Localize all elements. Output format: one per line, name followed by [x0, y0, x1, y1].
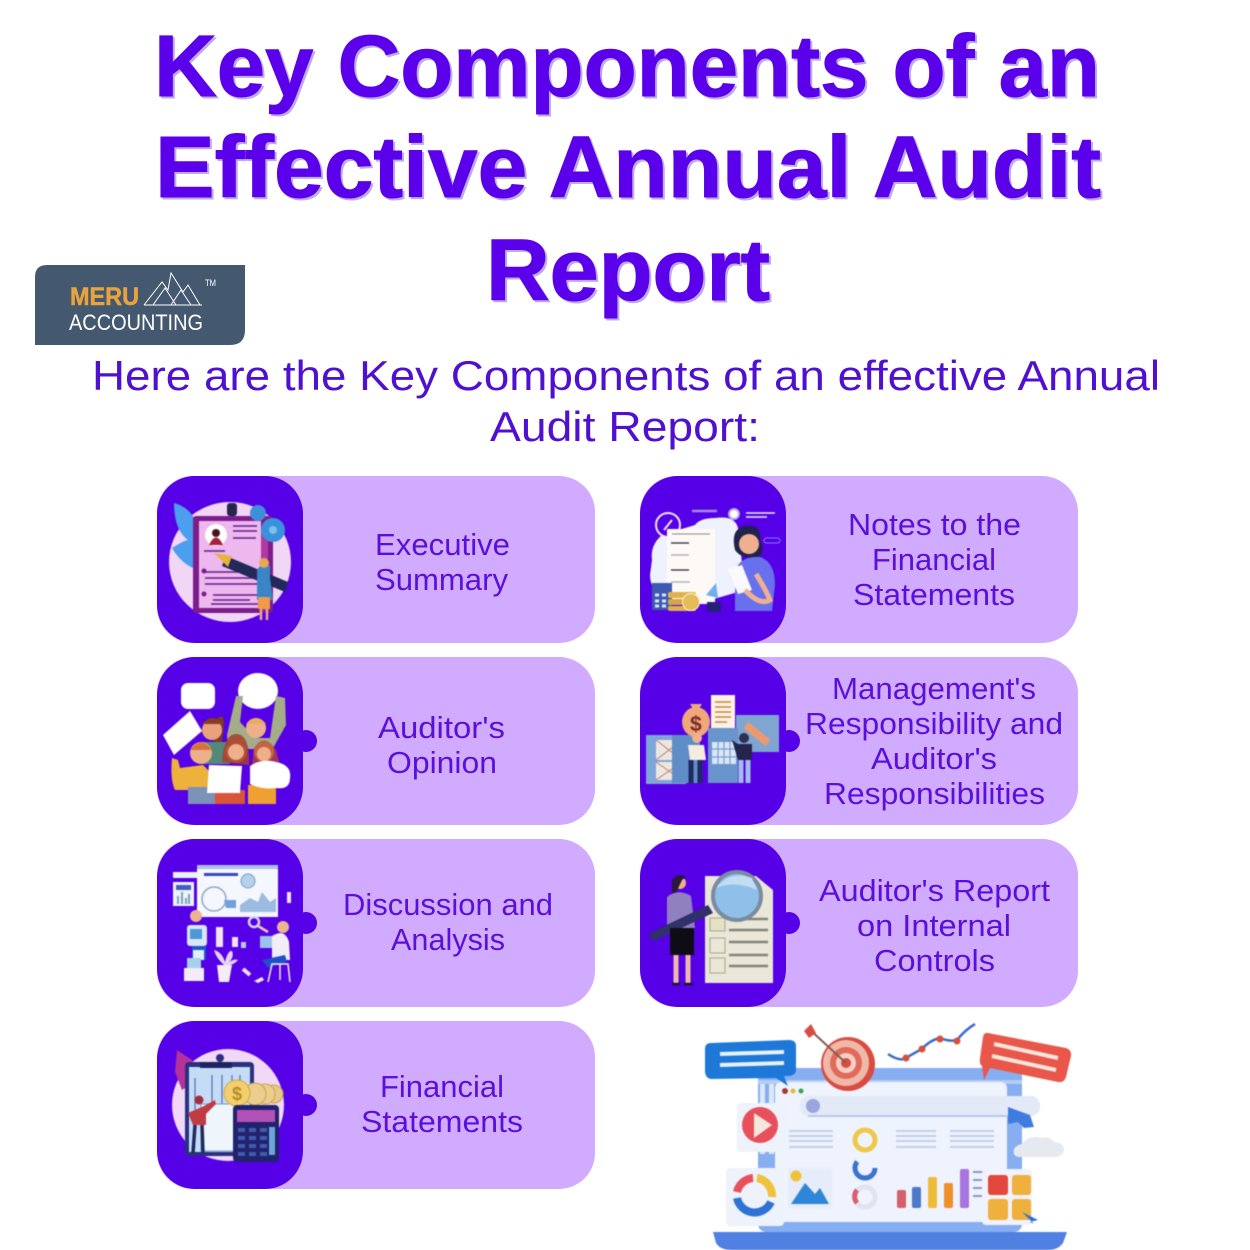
title: Key Components of an — [156, 20, 1102, 117]
icon: clipboard resume with pen — [169, 502, 291, 622]
icon: donut chart card — [726, 1168, 784, 1226]
panel: Executive Summary: Summary — [375, 562, 508, 597]
icon: money bag, receipt and two workers — [646, 695, 779, 784]
panel: Auditor's Report on Internal Controls: Controls — [874, 943, 995, 978]
panel: Notes to the Financial Statements: Statements — [853, 577, 1015, 612]
title: Key Components of an — [154, 18, 1100, 115]
title — [154, 18, 1103, 321]
panel: Notes to the Financial Statements: Financial — [872, 542, 996, 577]
panel: Auditor's Opinion — [157, 657, 595, 825]
text lines on the screen — [789, 1131, 994, 1147]
bar chart — [897, 1169, 983, 1208]
title: Report — [488, 224, 772, 321]
subtitle — [92, 352, 1160, 450]
logo: Meru Accounting: MERU — [70, 283, 139, 311]
line chart — [888, 1024, 975, 1062]
panel: Executive Summary: Executive — [375, 527, 510, 562]
icon: tile grid card — [982, 1169, 1038, 1225]
icon: cloud — [1014, 1137, 1064, 1157]
icon: blue speech bubble — [705, 1040, 796, 1086]
icon: picture with mountains — [788, 1168, 832, 1208]
icon: clipboard, coins and calculator: $ — [232, 1084, 242, 1104]
panel: Auditor's Report on Internal Controls — [640, 839, 1078, 1007]
title: Effective Annual Audit — [155, 119, 1101, 216]
icon: people presenting dashboards — [173, 865, 291, 983]
icon: red speech bubble — [980, 1033, 1071, 1082]
panel: Discussion and Analysis: Analysis — [391, 922, 505, 957]
panel: Financial Statements: Financial — [380, 1069, 504, 1104]
panel: Auditor's Opinion: Auditor's — [378, 710, 505, 745]
icon: money bag, receipt and two workers: $ — [690, 713, 702, 736]
logo: Meru Accounting — [35, 265, 245, 345]
panel: Auditor's Report on Internal Controls: Auditor's Report — [819, 873, 1050, 908]
icon: clipboard, coins and calculator — [172, 1049, 284, 1162]
subtitle: Here are the Key Components of an effective Annual — [92, 352, 1160, 399]
icon: target with arrow — [804, 1024, 875, 1091]
logo: Meru Accounting: ACCOUNTING — [69, 310, 203, 335]
panel: Financial Statements: Statements — [361, 1104, 523, 1139]
panel: Management's Responsibility and Auditor's Responsibilities: Management's — [832, 671, 1036, 706]
panel: Auditor's Opinion: Opinion — [387, 745, 497, 780]
title: Report — [486, 222, 770, 319]
panel: Notes to the Financial Statements: Notes to the — [848, 507, 1021, 542]
icon: group of people with speech bubbles — [163, 673, 290, 804]
title: Effective Annual Audit — [157, 121, 1103, 218]
subtitle: Audit Report: — [490, 403, 760, 450]
panel: Executive Summary — [157, 476, 595, 643]
logo: Meru Accounting: TM — [205, 278, 216, 288]
panel: Financial Statements — [157, 1021, 595, 1189]
illustration: laptop with analytics dashboard — [705, 1024, 1071, 1250]
panel: Discussion and Analysis — [157, 839, 595, 1007]
icon: woman reading a document — [650, 509, 780, 612]
panel: Notes to the Financial Statements — [640, 476, 1078, 643]
icon: small donut charts — [855, 1130, 875, 1207]
panel: Management's Responsibility and Auditor's Responsibilities: Responsibility and — [805, 706, 1063, 741]
panel: Auditor's Report on Internal Controls: on Internal — [857, 908, 1011, 943]
icon: play button card — [737, 1103, 787, 1152]
panel: Management's Responsibility and Auditor's Responsibilities: Responsibilities — [824, 776, 1045, 811]
panel: Management's Responsibility and Auditor's Responsibilities: Auditor's — [871, 741, 997, 776]
panel: Management's Responsibility and Auditor's Responsibilities — [640, 657, 1078, 825]
panel: Discussion and Analysis: Discussion and — [343, 887, 553, 922]
icon: woman with magnifying glass and checklist — [648, 872, 773, 984]
